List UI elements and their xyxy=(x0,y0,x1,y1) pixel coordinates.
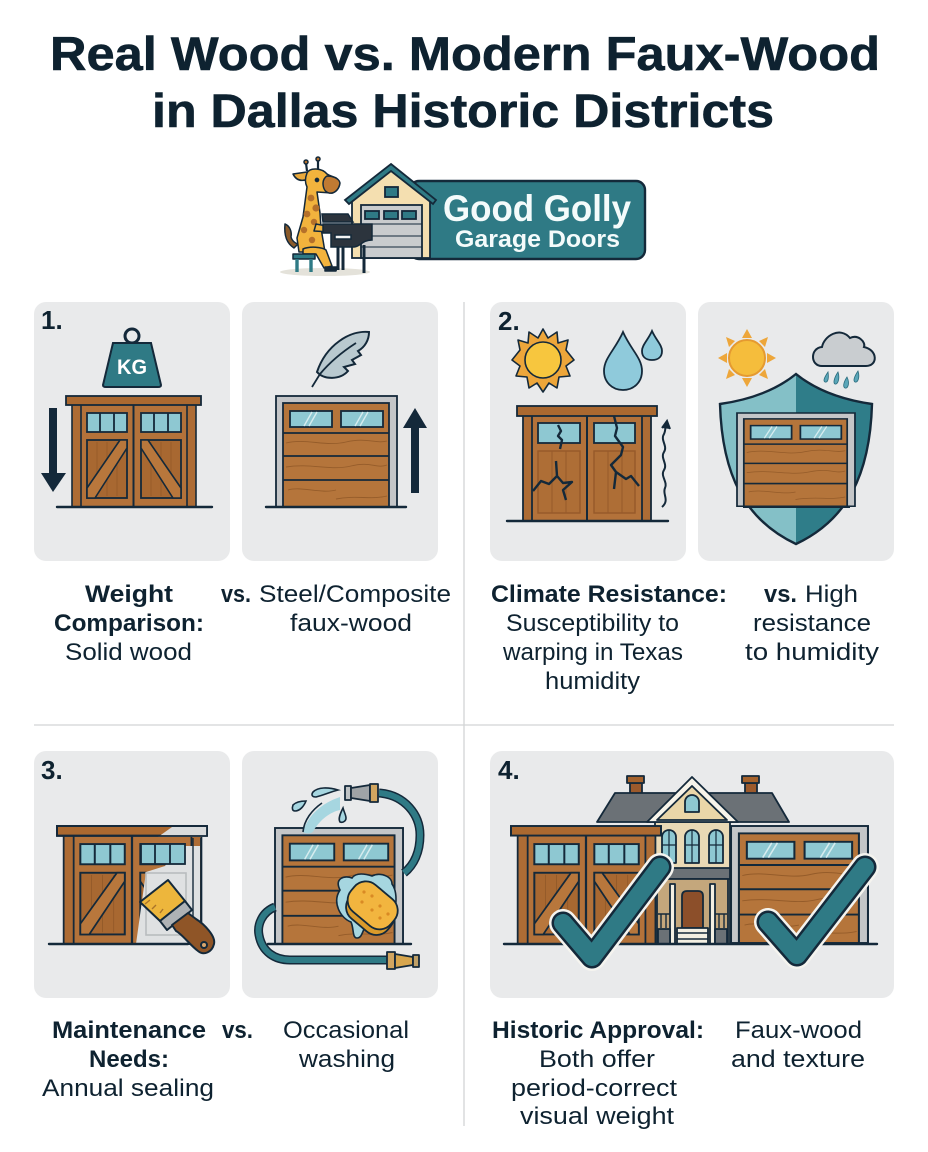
icon: water drops xyxy=(604,331,662,390)
caption: both offer xyxy=(492,1017,704,1130)
logo ground shadow xyxy=(280,268,370,276)
divider lines xyxy=(34,302,894,1126)
caption: annual sealing: vs. xyxy=(222,1017,253,1044)
logo wordmark: Good Golly xyxy=(443,188,631,229)
caption: both offer: visual weight xyxy=(520,1103,674,1130)
icon: hose xyxy=(259,793,420,960)
caption: occasional washing xyxy=(283,1017,409,1073)
number 2: 2. xyxy=(498,306,520,336)
panel 1: weight comparison xyxy=(34,302,451,666)
caption: solid wood: Solid wood xyxy=(65,639,192,666)
caption: annual sealing: Annual sealing xyxy=(42,1075,214,1102)
logo garage xyxy=(345,164,436,258)
panel 2: climate resistance xyxy=(490,302,894,695)
card: occasional washing xyxy=(242,751,438,998)
carriage door xyxy=(66,396,201,507)
icon: nozzles xyxy=(345,784,419,969)
card: shield xyxy=(698,302,894,561)
icon: sponge xyxy=(337,874,404,941)
caption: faux-wood and texture: and texture xyxy=(731,1046,865,1073)
logo banner xyxy=(410,181,645,259)
icon: KG weight: KG xyxy=(117,356,147,379)
caption: solid wood xyxy=(54,581,204,666)
door being sealed xyxy=(57,826,207,944)
caption: annual sealing: Maintenance xyxy=(52,1017,206,1044)
icon: spiky sun xyxy=(512,329,574,392)
panel 4: historic approval xyxy=(490,751,894,1130)
icon: paint brush xyxy=(140,880,214,953)
caption: climate resistance: Susceptibility to xyxy=(506,610,679,637)
caption: high resistance: vs. xyxy=(764,581,797,608)
caption: both offer: Both offer xyxy=(539,1046,655,1073)
unfinished door area xyxy=(57,826,207,944)
caption: solid wood: Comparison: xyxy=(54,610,204,637)
caption: high resistance: resistance xyxy=(753,610,871,637)
title xyxy=(50,27,880,137)
card: annual sealing xyxy=(34,751,230,998)
icon: feather xyxy=(312,332,369,387)
caption: climate resistance: humidity xyxy=(545,668,640,695)
caption: climate resistance: warping in Texas xyxy=(502,639,683,666)
card xyxy=(490,751,894,998)
icon: water splash xyxy=(292,788,346,833)
caption: occasional washing: washing xyxy=(298,1046,395,1073)
caption: annual sealing xyxy=(42,1017,253,1102)
shield door xyxy=(737,413,855,506)
card: faux wood xyxy=(242,302,438,561)
cracked door xyxy=(517,406,657,521)
number 4: 4. xyxy=(498,755,520,785)
icon: check mark right xyxy=(768,867,865,955)
caption: climate resistance xyxy=(491,581,727,695)
caption: both offer: Historic Approval: xyxy=(492,1017,704,1044)
panel 3: maintenance needs xyxy=(34,751,438,1102)
modern door xyxy=(276,396,397,507)
icon: sun xyxy=(718,329,776,387)
modern door xyxy=(731,826,868,943)
icon: up arrow xyxy=(403,408,427,493)
caption: faux-wood and texture xyxy=(731,1017,865,1073)
card: wood warping xyxy=(490,302,686,561)
caption: both offer: period-correct xyxy=(511,1075,677,1102)
number 1: 1. xyxy=(41,305,63,335)
caption: high resistance: to humidity xyxy=(745,639,879,666)
caption: occasional washing: Occasional xyxy=(283,1017,409,1044)
caption: faux-wood and texture: Faux-wood xyxy=(735,1017,862,1044)
caption: steel composite: vs. xyxy=(221,581,251,608)
icon: rain cloud xyxy=(813,333,875,388)
icon: historic house xyxy=(597,776,789,944)
icon: shield xyxy=(720,374,872,544)
caption: annual sealing: Needs: xyxy=(89,1046,169,1073)
carriage door xyxy=(511,826,661,944)
caption: steel composite: faux-wood xyxy=(290,610,412,637)
title: Real Wood vs. Modern Faux-Wood xyxy=(50,27,880,80)
modern door xyxy=(275,828,403,944)
caption: high resistance xyxy=(745,581,879,666)
icon: KG weight xyxy=(103,329,161,387)
logo: Good Golly Garage Doors xyxy=(280,157,645,276)
icon: down arrow xyxy=(41,408,66,492)
icon: check mark left xyxy=(563,867,660,957)
caption: climate resistance: Climate Resistance: xyxy=(491,581,727,608)
logo wordmark xyxy=(443,188,631,253)
caption: solid wood: Weight xyxy=(85,581,173,608)
caption: steel composite xyxy=(221,581,451,637)
number 3: 3. xyxy=(41,755,63,785)
logo piano xyxy=(322,214,372,273)
caption: high resistance: High xyxy=(805,581,858,608)
logo wordmark: Garage Doors xyxy=(455,226,620,253)
title: in Dallas Historic Districts xyxy=(152,84,774,137)
icon: wavy arrow xyxy=(662,421,670,507)
card: solid wood xyxy=(34,302,230,561)
caption: steel composite: Steel/Composite xyxy=(259,581,451,608)
logo giraffe xyxy=(285,157,340,272)
